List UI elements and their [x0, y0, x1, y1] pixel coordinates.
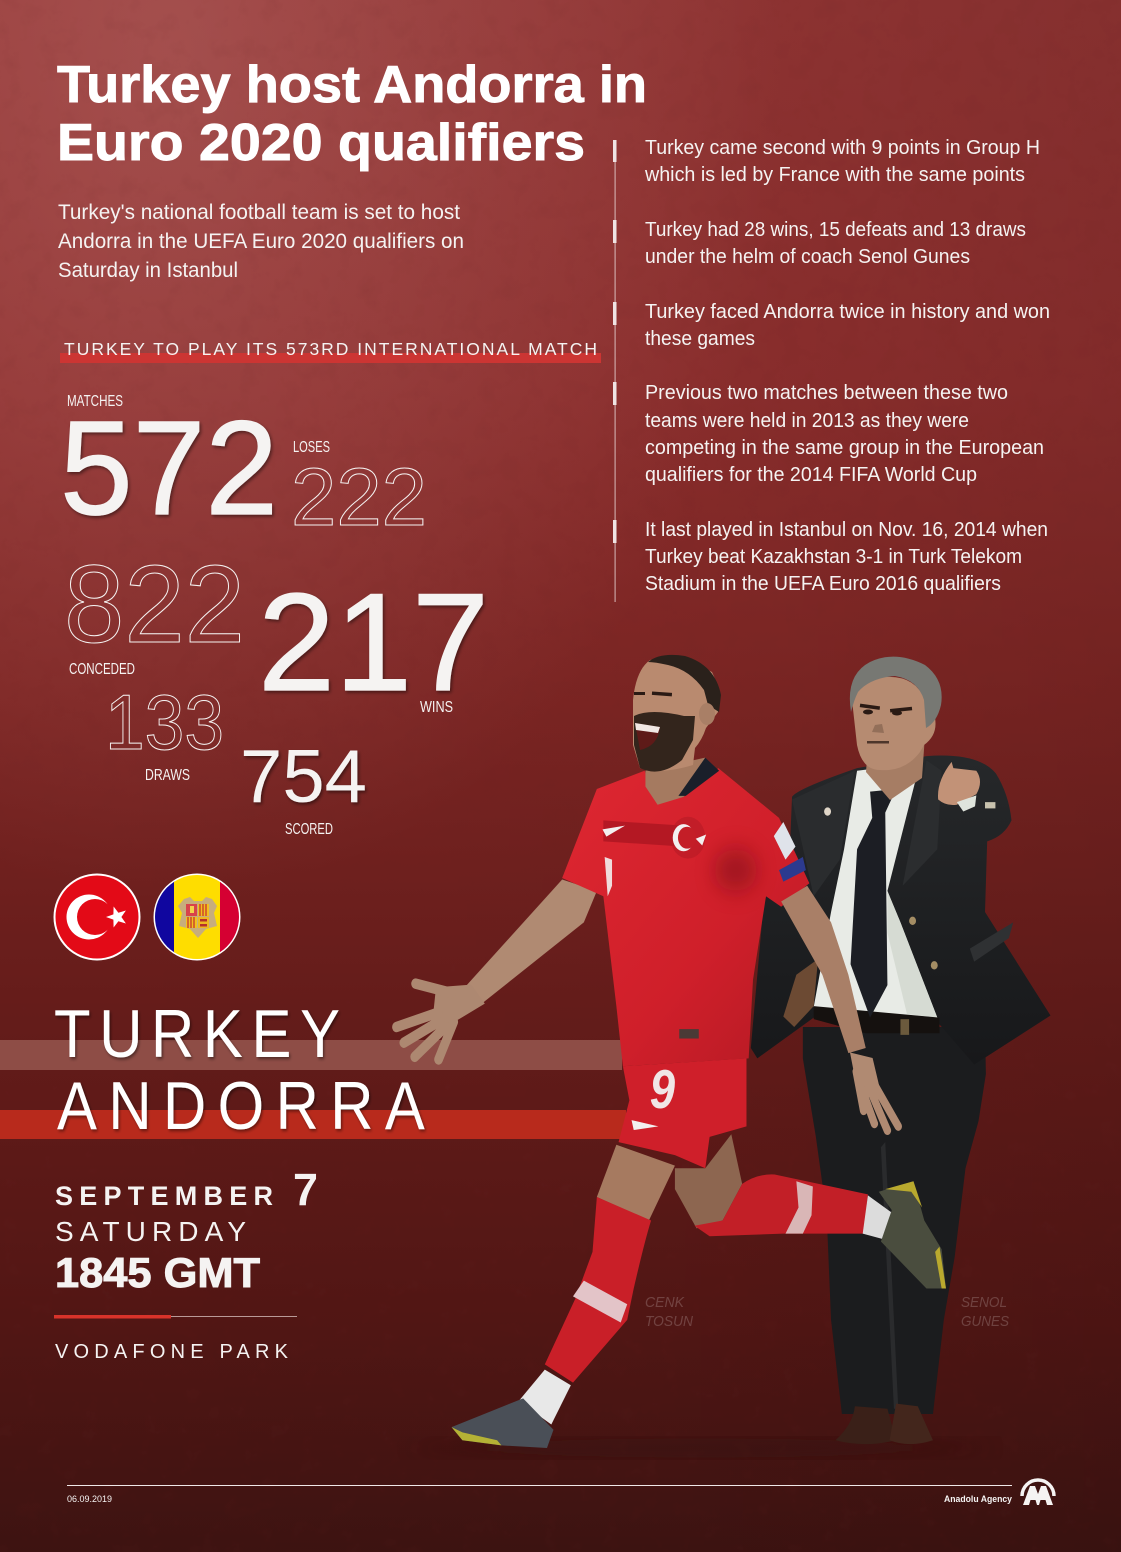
stat: matches: MATCHES [67, 393, 123, 410]
timeline rule [613, 140, 616, 602]
team name: Andorra: ANDORRA [57, 1067, 425, 1144]
stat: matches: 572 [60, 394, 278, 543]
shorts [619, 1058, 746, 1168]
caption: Cenk Tosun: TOSUN [645, 1313, 693, 1330]
flag: Turkey [54, 874, 140, 960]
coach body [751, 756, 1051, 1444]
stat: conceded: 822 [64, 543, 245, 666]
facts column [613, 136, 1050, 602]
fact: coach record: under the helm of coach Senol Gunes [645, 245, 970, 268]
fact: previous matches [645, 381, 1044, 486]
belt [814, 1006, 939, 1033]
caption: Senol Gunes: GUNES [961, 1313, 1009, 1330]
match date: 7 [293, 1164, 318, 1215]
flag: Andorra [154, 874, 240, 960]
caption: Senol Gunes [961, 1294, 1009, 1330]
jersey [562, 768, 809, 1066]
stat: loses: LOSES [293, 439, 330, 456]
stat: conceded: CONCEDED [69, 661, 135, 678]
sleeve buttons [985, 802, 995, 808]
shoes [835, 1406, 896, 1444]
hip glove [783, 959, 818, 1027]
back thigh [675, 1134, 742, 1228]
section heading: international match: TURKEY TO PLAY ITS 573RD INTERNATIONAL MATCH [64, 339, 597, 359]
footer credit: Anadolu Agency [944, 1494, 1012, 1504]
fact: last Istanbul match: Turkey beat Kazakhstan 3-1 in Turk Telekom [645, 545, 1022, 568]
stats block [60, 393, 489, 838]
stat: loses: 222 [291, 452, 427, 543]
jacket [751, 756, 1051, 1065]
stat: scored: 754 [240, 734, 367, 818]
match day: SATURDAY [55, 1216, 246, 1247]
match date: SEPTEMBER [55, 1181, 273, 1211]
fact: previous matches: qualifiers for the 2014 FIFA World Cup [645, 463, 977, 486]
player body: 9 [650, 1058, 675, 1120]
fact: group standing: Turkey came second with 9 points in Group H [645, 136, 1040, 159]
player hair [648, 655, 721, 712]
fact: previous matches: teams were held in 2013 as they were [645, 409, 969, 432]
player mouth [635, 723, 660, 750]
fact: coach record [645, 218, 1026, 268]
coach face [852, 677, 936, 770]
trousers [803, 1027, 986, 1414]
band: Andorra [0, 1110, 626, 1139]
fact: previous matches: Previous two matches between these two [645, 381, 1008, 404]
stat: wins: 217 [258, 565, 489, 720]
shirt cuff [957, 795, 976, 812]
coach hair [850, 657, 942, 728]
jacket buttons [824, 807, 831, 816]
caption: Cenk Tosun [645, 1294, 693, 1330]
stat: draws: 133 [105, 678, 224, 766]
intro text: Andorra in the UEFA Euro 2020 qualifiers on [58, 229, 464, 253]
left arm [467, 880, 597, 1003]
photo ground shadow [410, 1438, 990, 1458]
fact: last Istanbul match [645, 518, 1048, 595]
right arm [781, 886, 866, 1053]
coach Senol Gunes [751, 657, 1051, 1444]
title: Euro 2020 qualifiers [57, 114, 585, 172]
fact: previous matches: competing in the same group in the European [645, 436, 1044, 459]
front thigh [597, 1145, 675, 1221]
fact: head to head [645, 300, 1050, 350]
stat: draws: DRAWS [145, 767, 190, 784]
fact: last Istanbul match: Stadium in the UEFA Euro 2016 qualifiers [645, 572, 1001, 595]
intro text: Turkey's national football team is set to host [58, 200, 460, 224]
fact: group standing [644, 136, 1040, 186]
kick-off time: 1845 GMT [55, 1249, 260, 1296]
fact: group standing: which is led by France with the same points [644, 163, 1025, 186]
venue: VODAFONE PARK [55, 1341, 289, 1363]
fact: last Istanbul match: It last played in Istanbul on Nov. 16, 2014 when [645, 518, 1048, 541]
intro text [58, 200, 464, 282]
player eyes [634, 691, 672, 696]
pointing hand [938, 762, 980, 805]
footer date: 06.09.2019 [67, 1494, 112, 1504]
stat: scored: SCORED [285, 821, 333, 838]
front boot [452, 1398, 553, 1448]
front sock [545, 1197, 651, 1383]
tie [851, 789, 896, 1018]
player face [633, 659, 720, 771]
player ear [699, 703, 715, 725]
team name: Turkey: TURKEY [54, 995, 340, 1072]
match details [54, 1164, 318, 1363]
match date [55, 1164, 318, 1215]
player body [396, 758, 946, 1448]
neck [645, 758, 710, 805]
caption: Senol Gunes: SENOL [961, 1294, 1007, 1311]
coach neck [866, 735, 925, 800]
title [57, 56, 647, 172]
player beard [634, 712, 695, 772]
back sock [694, 1174, 868, 1236]
fact: coach record: Turkey had 28 wins, 15 defeats and 13 draws [645, 218, 1026, 241]
icon: Anadolu Agency logo [1022, 1480, 1054, 1505]
player Cenk Tosun [396, 655, 946, 1448]
intro text: Saturday in Istanbul [58, 258, 238, 282]
back boot [879, 1181, 946, 1289]
coach facial features [860, 704, 912, 744]
caption: Cenk Tosun: CENK [645, 1294, 685, 1311]
shirt [814, 763, 937, 1018]
title: Turkey host Andorra in [57, 56, 647, 114]
fact: head to head: these games [645, 327, 755, 350]
footer [67, 1480, 1054, 1505]
left hand [396, 984, 484, 1059]
fact: head to head: Turkey faced Andorra twice in history and won [645, 300, 1050, 323]
stat: wins: WINS [420, 699, 453, 716]
band: Turkey [0, 1040, 622, 1070]
right hand [851, 1053, 898, 1131]
